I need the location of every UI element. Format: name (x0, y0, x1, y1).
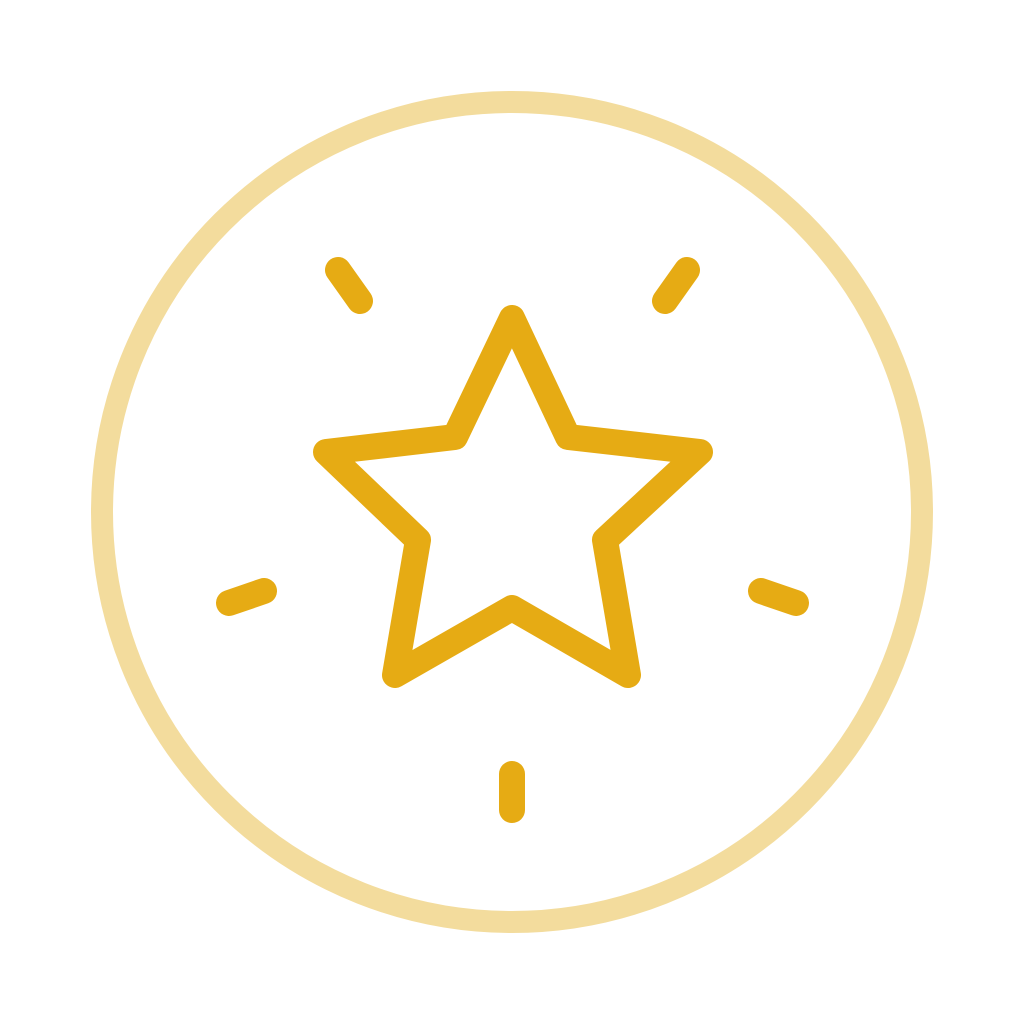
icon: star (326, 318, 700, 675)
icon: sparkle rays (229, 270, 796, 810)
icon: outer ring (102, 102, 922, 922)
